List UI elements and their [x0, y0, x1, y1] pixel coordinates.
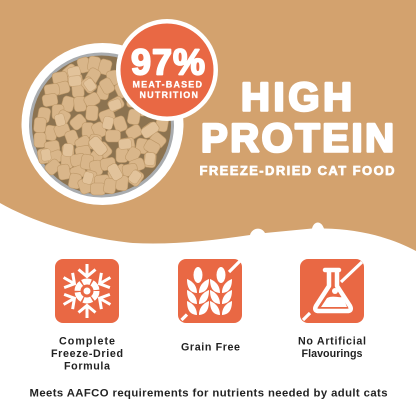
label: complete freeze-dried formula: Complete	[59, 336, 115, 348]
label: no artificial flavourings: No Artificial	[298, 336, 366, 348]
badge: 97% meat-based nutrition: 97%	[131, 42, 205, 82]
icon: snowflake	[55, 259, 119, 323]
badge: 97% meat-based nutrition: MEAT-BASED	[132, 80, 202, 90]
label: no artificial flavourings	[298, 336, 366, 360]
subtitle: FREEZE-DRIED CAT FOOD	[200, 163, 394, 178]
title: HIGH PROTEIN	[201, 75, 394, 160]
icon: grain free	[178, 259, 242, 323]
badge: 97% meat-based nutrition	[116, 19, 218, 121]
title: HIGH PROTEIN: PROTEIN	[201, 116, 394, 160]
label: complete freeze-dried formula	[51, 336, 123, 372]
icon: flask crossed out	[300, 259, 364, 323]
food bowl	[22, 43, 184, 205]
label: no artificial flavourings: Flavourings	[302, 348, 363, 360]
badge: 97% meat-based nutrition: NUTRITION	[140, 90, 198, 100]
label: complete freeze-dried formula: Formula	[64, 360, 111, 372]
title: HIGH PROTEIN: HIGH	[241, 75, 352, 119]
label: complete freeze-dried formula: Freeze-Dried	[51, 348, 123, 360]
label: grain free: Grain Free	[181, 342, 240, 354]
white lower panel with cat ears	[0, 203, 416, 416]
footer note: Meets AAFCO requirements for nutrients needed by adult cats	[30, 388, 388, 400]
